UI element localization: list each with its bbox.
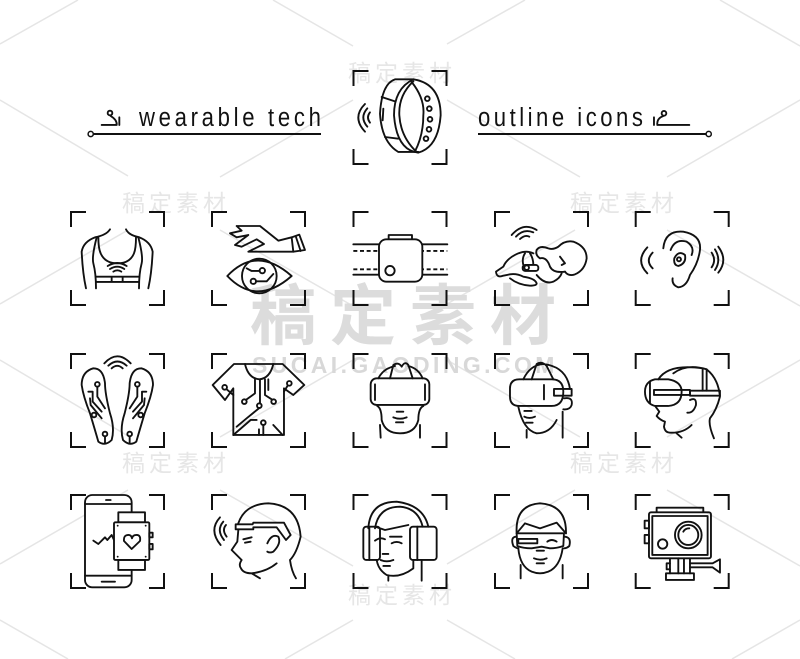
icon: VR headset front view <box>354 354 446 447</box>
watermark: small left upper: 稿定素材 <box>122 190 230 216</box>
icon: baby with monitor <box>495 212 588 305</box>
watermark: large center: SUCAI.GAODING.COM <box>252 352 556 378</box>
icon: smart insoles <box>71 354 164 447</box>
icon: smart sports bra <box>71 212 164 305</box>
watermark: small left lower: 稿定素材 <box>122 450 230 476</box>
watermark: small right lower: 稿定素材 <box>570 450 678 476</box>
heading left: wearable tech: wearable tech <box>138 103 321 132</box>
icon: hand over circuit eye <box>212 212 305 305</box>
icon: phone and smartwatch heart rate <box>71 495 164 588</box>
icon: ear with signal <box>636 212 729 305</box>
heading right: outline icons <box>478 103 711 137</box>
icon: fitness bracelet <box>354 71 446 164</box>
icon: action camera <box>636 495 729 588</box>
watermark: small top: 稿定素材 <box>348 60 456 86</box>
heading left: wearable tech <box>88 103 321 137</box>
watermark: large center: 稿定素材 <box>250 279 570 353</box>
icon: head with smart glasses <box>495 495 588 588</box>
icon: circuit t-shirt <box>212 354 305 447</box>
icon: head with neural band <box>212 495 305 588</box>
watermark: small right upper: 稿定素材 <box>570 190 678 216</box>
icon: VR headset three-quarter view <box>495 354 588 447</box>
heading right: outline icons: outline icons <box>478 103 643 132</box>
watermark: small bottom: 稿定素材 <box>348 582 456 608</box>
icon: head with headphones <box>354 495 446 588</box>
icon: VR headset side view <box>636 354 729 447</box>
icon: clip-on band tracker <box>353 212 447 305</box>
